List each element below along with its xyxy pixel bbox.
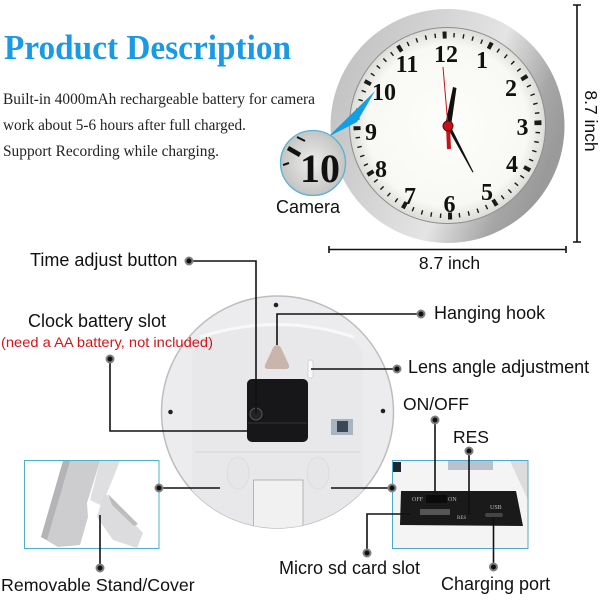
- width dimension: 8.7 inch: [419, 253, 480, 273]
- battery movement: [247, 379, 308, 442]
- label: lens angle adjustment: Lens angle adjustment: [408, 357, 589, 377]
- clock numerals: 9: [365, 120, 377, 146]
- label: battery note: (need a AA battery, not included): [1, 334, 213, 350]
- clock numerals: [365, 42, 528, 218]
- leader lines and dots: [96, 258, 497, 572]
- clock numerals: 11: [396, 52, 418, 78]
- clock numerals: 3: [516, 115, 528, 141]
- QR label: [331, 419, 353, 435]
- back of clock: [162, 296, 394, 540]
- label: clock battery slot: Clock battery slot: [28, 311, 166, 331]
- right port photo: RES: [457, 516, 466, 521]
- front clock: [330, 9, 564, 243]
- description text: [3, 91, 315, 160]
- clock numerals: 4: [506, 152, 518, 178]
- camera label: Camera: [276, 197, 341, 217]
- description text: Built-in 4000mAh rechargeable battery for camera: [3, 91, 315, 108]
- camera magnifier: [280, 130, 346, 196]
- camera callout pointer: [328, 91, 375, 137]
- title: Product Description: [4, 28, 291, 67]
- clock numerals: 12: [434, 42, 458, 68]
- hanging hook slot: [265, 345, 289, 369]
- right port photo: OFF: [412, 497, 424, 503]
- clock numerals: 7: [404, 184, 416, 210]
- lens adjustment slot: [308, 360, 313, 378]
- label: micro sd: Micro sd card slot: [279, 558, 420, 578]
- right port photo: [392, 460, 528, 548]
- clock numerals: 10: [372, 80, 396, 106]
- camera magnifier: 10: [300, 146, 340, 191]
- label: charging port: Charging port: [441, 574, 550, 594]
- right port photo: USB: [490, 505, 502, 511]
- right port photo: ON: [448, 497, 457, 503]
- clock hands: [443, 67, 474, 172]
- clock numerals: 2: [505, 76, 517, 102]
- clock ticks: [355, 33, 540, 218]
- description text: work about 5-6 hours after full charged.: [3, 117, 246, 134]
- screw holes: [168, 303, 385, 414]
- vents: [227, 457, 329, 489]
- width dimension: [329, 246, 566, 273]
- clock numerals: 1: [476, 48, 488, 74]
- label: on/off: ON/OFF: [403, 394, 469, 414]
- clock numerals: 6: [444, 192, 456, 218]
- label: res: RES: [453, 427, 489, 447]
- description text: Support Recording while charging.: [3, 143, 219, 160]
- label: removable stand: Removable Stand/Cover: [1, 575, 195, 595]
- label: hanging hook: Hanging hook: [434, 303, 546, 323]
- stand tab: [253, 480, 304, 528]
- clock numerals: 5: [481, 180, 493, 206]
- clock numerals: 8: [375, 157, 387, 183]
- height dimension: [573, 5, 600, 242]
- label: time adjust button: Time adjust button: [30, 250, 177, 270]
- left stand photo: [24, 460, 159, 548]
